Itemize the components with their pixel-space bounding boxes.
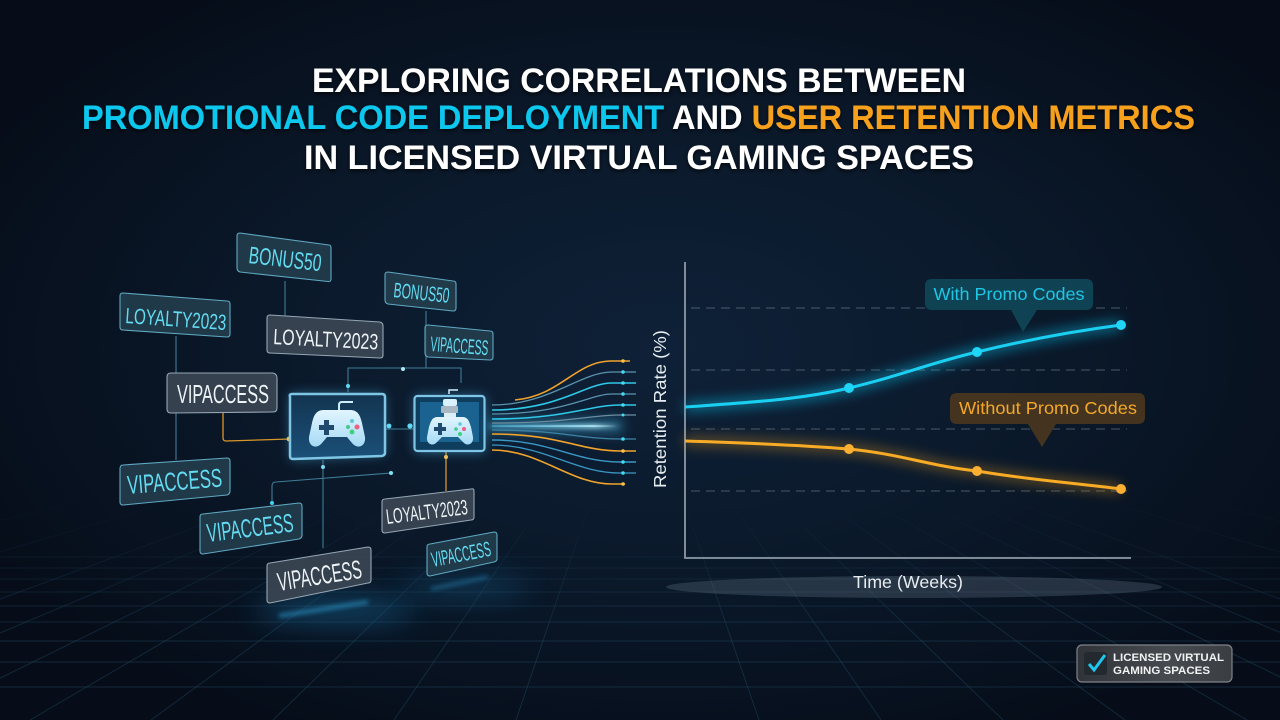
cyan data points bbox=[844, 320, 1126, 393]
icon: checkmark bbox=[1084, 652, 1107, 675]
code tag: VIPACCESS bottom: VIPACCESS bbox=[275, 554, 364, 597]
code tag: LOYALTY2023 right: LOYALTY2023 bbox=[385, 496, 469, 529]
code tag: VIPACCESS bottom bbox=[267, 547, 371, 603]
code tag: LOYALTY2023 blue bbox=[120, 293, 230, 337]
code tag: BONUS50 small: BONUS50 bbox=[392, 279, 451, 308]
code tag: LOYALTY2023 right bbox=[382, 489, 474, 533]
x-axis base ellipse bbox=[666, 576, 1162, 598]
badge text: GAMING SPACES bbox=[1113, 665, 1210, 677]
icon: robot controller monitor bbox=[414, 390, 485, 452]
title: PROMOTIONAL CODE DEPLOYMENT AND USER RETENTION METRICS bbox=[82, 99, 1195, 137]
code tag: VIPACCESS blue middle bbox=[200, 503, 302, 554]
code tag: VIPACCESS blue left bbox=[120, 458, 230, 505]
orange data points bbox=[844, 444, 1126, 494]
axes bbox=[685, 262, 1131, 558]
connector lines bbox=[176, 281, 461, 548]
y-axis label: Retention Rate (%) bbox=[650, 330, 670, 488]
code tag: BONUS50 small bbox=[385, 272, 456, 311]
callout: with promo codes bbox=[925, 279, 1093, 332]
code tag: VIPACCESS grey bbox=[167, 373, 277, 413]
code tag: VIPACCESS small right: VIPACCESS bbox=[430, 538, 493, 572]
code tag: LOYALTY2023 white: LOYALTY2023 bbox=[273, 324, 379, 354]
cyan line glow bbox=[685, 325, 1121, 407]
code tag: VIPACCESS small right bbox=[427, 532, 497, 576]
code tag: VIPACCESS blue middle: VIPACCESS bbox=[205, 508, 295, 548]
code tag: VIPACCESS blue left: VIPACCESS bbox=[126, 463, 223, 500]
x-axis label: Time (Weeks) bbox=[853, 572, 963, 592]
code tag: BONUS50 large: BONUS50 bbox=[247, 242, 323, 277]
title bbox=[82, 62, 1195, 177]
line chart: retention over time bbox=[650, 262, 1162, 598]
code tag: VIPACCESS upper right bbox=[425, 325, 493, 360]
callout: without promo codes: Without Promo Codes bbox=[959, 398, 1137, 418]
cyan line: with promo codes bbox=[685, 325, 1121, 407]
code tag: LOYALTY2023 blue: LOYALTY2023 bbox=[125, 303, 227, 335]
badge text bbox=[1113, 652, 1224, 677]
title: IN LICENSED VIRTUAL GAMING SPACES bbox=[304, 139, 974, 177]
title: EXPLORING CORRELATIONS BETWEEN bbox=[312, 62, 966, 100]
floor glow under tags bbox=[255, 577, 530, 624]
data flow stream bbox=[488, 359, 636, 486]
code tag: LOYALTY2023 white bbox=[267, 315, 383, 358]
icon: game controller monitor bbox=[290, 394, 385, 460]
callout: without promo codes bbox=[950, 393, 1145, 447]
code tag: VIPACCESS upper right: VIPACCESS bbox=[430, 333, 489, 360]
code tag: VIPACCESS grey: VIPACCESS bbox=[177, 379, 269, 409]
code tag: BONUS50 large bbox=[237, 233, 331, 282]
orange line glow bbox=[685, 441, 1121, 489]
badge text: LICENSED VIRTUAL bbox=[1113, 652, 1224, 664]
orange line: without promo codes bbox=[685, 441, 1121, 489]
gridlines bbox=[691, 308, 1127, 491]
badge: licensed virtual gaming spaces bbox=[1077, 645, 1232, 682]
floor grid bbox=[0, 533, 1280, 720]
callout: with promo codes: With Promo Codes bbox=[934, 284, 1085, 304]
